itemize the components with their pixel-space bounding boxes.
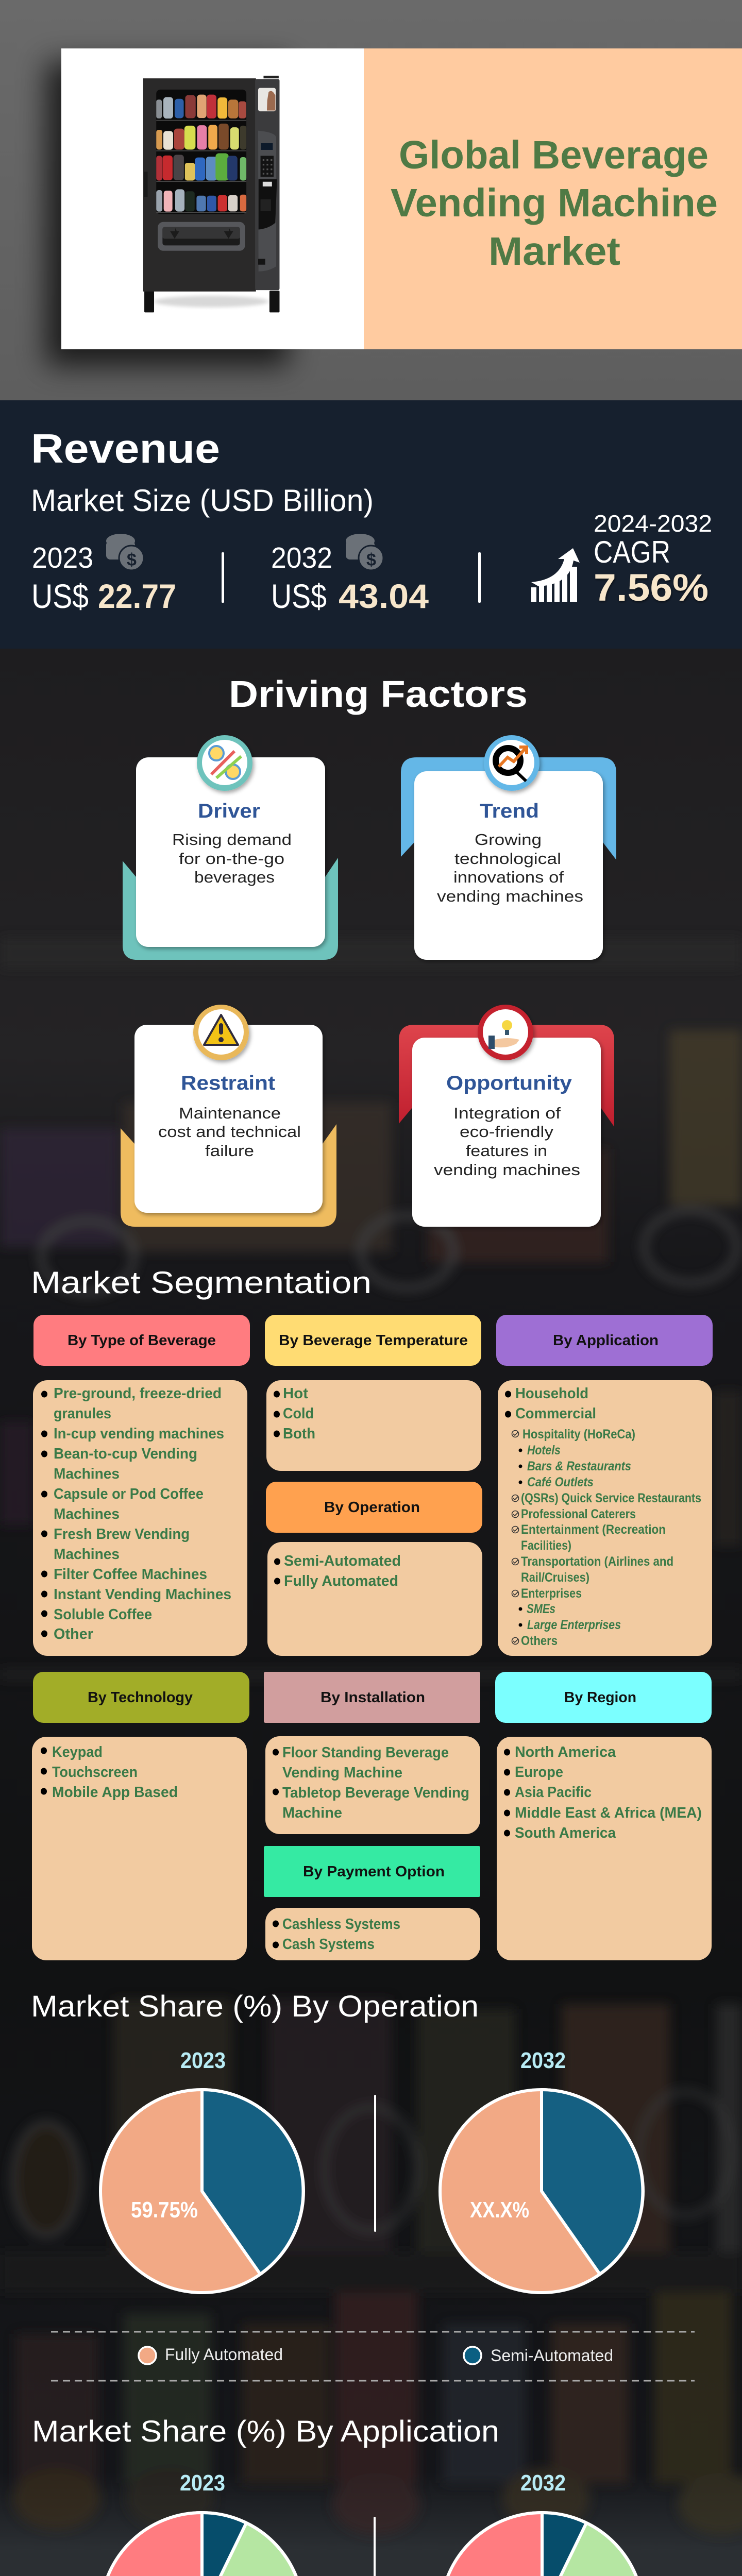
header: product image card <box>61 48 364 349</box>
panel: by type of beverage: Filter Coffee Machines <box>54 1566 207 1583</box>
panel: by type of beverage: granules <box>54 1405 111 1422</box>
heading: market segmentation: Market Segmentation <box>31 1265 372 1300</box>
panel: by operation: Fully Automated <box>284 1573 398 1589</box>
panel: by type of beverage: Instant Vending Machines <box>54 1586 231 1603</box>
legend: operation: Semi-Automated <box>491 2346 613 2365</box>
icon: hand and light bulb <box>478 1005 533 1060</box>
stat: 2032 revenue: 43.04 <box>339 577 429 615</box>
panel: by region: South America <box>515 1825 616 1841</box>
chart: operation 2023 pie: 59.75% <box>131 2197 198 2223</box>
panel: by application: Professional Caterers <box>521 1507 636 1521</box>
heading: driving factors: Driving Factors <box>229 674 528 715</box>
panel: by technology: Mobile App Based <box>52 1784 178 1801</box>
icon: coins 2023 <box>106 534 144 570</box>
panel: revenue <box>0 400 742 649</box>
panel: by application: (QSRs) Quick Service Restaurants <box>521 1491 701 1505</box>
panel: by installation: Vending Machine <box>282 1765 402 1781</box>
chart: application 2023 pie <box>100 2470 303 2576</box>
stat: CAGR: 2024-2032 <box>594 510 712 537</box>
chart: operation 2032 pie: 2032 <box>520 2048 566 2073</box>
panel: by operation: By Operation <box>324 1499 420 1516</box>
panel: by beverage temperature <box>265 1315 481 1471</box>
panel: by operation <box>266 1482 482 1656</box>
chart: operation 2023 pie: 2023 <box>180 2048 226 2073</box>
card: restraint: Maintenance <box>179 1104 281 1122</box>
panel: by type of beverage: Pre-ground, freeze-dried <box>54 1385 222 1402</box>
panel: by payment option: By Payment Option <box>303 1863 445 1880</box>
panel: by application: Household <box>515 1385 588 1402</box>
panel: by beverage temperature: Cold <box>283 1405 314 1422</box>
card: restraint: cost and technical <box>158 1123 301 1141</box>
title panel: Vending Machine <box>391 181 718 225</box>
card: driver: beverages <box>194 868 275 886</box>
panel: by type of beverage: Soluble Coffee <box>54 1606 152 1623</box>
stat: 2023 revenue: 22.77 <box>98 577 176 615</box>
panel: by region: North America <box>515 1744 616 1760</box>
icon: trend magnifier <box>484 735 539 791</box>
panel: by application: Others <box>521 1634 558 1648</box>
panel: by application: Facilities) <box>521 1538 571 1553</box>
panel: by beverage temperature: By Beverage Temperature <box>279 1332 468 1349</box>
card: restraint: Restraint <box>181 1072 275 1094</box>
title panel: Global Beverage <box>399 133 709 177</box>
panel: by application: Entertainment (Recreation <box>521 1522 666 1537</box>
stat: 2023 revenue: US$ <box>31 577 89 615</box>
panel: by installation: Tabletop Beverage Vending <box>282 1785 469 1801</box>
panel: by installation: Machine <box>282 1805 342 1821</box>
panel: by application: Café Outlets <box>527 1475 594 1489</box>
icon: vending machine <box>143 76 279 312</box>
panel: by installation <box>264 1672 480 1834</box>
icon: growth arrow <box>531 548 580 602</box>
chart: operation 2023 pie <box>100 2048 303 2293</box>
panel: by application: Large Enterprises <box>527 1618 621 1632</box>
background: dark photo collage <box>0 649 742 2576</box>
card: opportunity: Integration of <box>453 1104 561 1122</box>
panel: by type of beverage: Capsule or Pod Coffee <box>54 1486 204 1502</box>
panel: by region: Europe <box>515 1764 563 1781</box>
stat: 2032 revenue <box>271 541 429 615</box>
stat: 2032 revenue: 2032 <box>271 541 332 574</box>
card: driver: Driver <box>198 800 260 822</box>
panel: by application: SMEs <box>527 1602 555 1616</box>
legend: operation <box>139 2345 613 2365</box>
panel: by payment option: Cash Systems <box>282 1936 375 1953</box>
panel: by application <box>496 1315 713 1656</box>
title panel: Market <box>488 229 620 274</box>
heading: market share by operation: Market Share (%) By Operation <box>31 1990 479 2023</box>
panel: by type of beverage: Other <box>54 1626 93 1642</box>
panel: by type of beverage: By Type of Beverage <box>68 1332 216 1349</box>
panel: by payment option: Cashless Systems <box>282 1916 400 1933</box>
panel: by application: Commercial <box>515 1405 596 1422</box>
heading: revenue: Revenue <box>31 426 220 471</box>
panel: by technology: By Technology <box>88 1689 193 1706</box>
panel: by beverage temperature: Both <box>283 1426 315 1442</box>
stat: CAGR: CAGR <box>594 535 670 569</box>
stat: CAGR <box>594 510 712 609</box>
card: trend: Growing <box>475 831 542 849</box>
heading: market share by application: Market Share (%) By Application <box>32 2415 499 2448</box>
panel: by application: By Application <box>553 1332 659 1349</box>
icon: coins 2023: $ <box>127 550 137 570</box>
panel: by payment option <box>264 1846 480 1960</box>
panel: by application: Enterprises <box>521 1586 582 1601</box>
stat: CAGR: 7.56% <box>594 566 709 609</box>
card: opportunity: Opportunity <box>446 1072 572 1094</box>
panel: by region: Asia Pacific <box>515 1784 592 1801</box>
card: opportunity <box>399 1005 614 1227</box>
card: driver: Rising demand <box>172 831 292 849</box>
panel: by type of beverage: Machines <box>54 1466 120 1482</box>
panel: by technology: Keypad <box>52 1744 103 1760</box>
panel: by operation: Semi-Automated <box>284 1553 401 1569</box>
card: opportunity: features in <box>466 1142 547 1160</box>
panel: by region: By Region <box>564 1689 636 1706</box>
panel: by region <box>495 1672 712 1960</box>
panel: by application: Rail/Cruises) <box>521 1570 589 1585</box>
panel: by region: Middle East & Africa (MEA) <box>515 1805 702 1821</box>
legend: operation: Fully Automated <box>165 2345 283 2364</box>
card: trend: Trend <box>480 800 539 822</box>
card: trend: innovations of <box>453 868 564 886</box>
market size subheading: Market Size (USD Billion) <box>31 483 374 518</box>
card: driver <box>123 735 338 960</box>
card: trend <box>401 735 616 960</box>
chart: operation 2032 pie: XX.X% <box>470 2197 529 2223</box>
panel: by application: Transportation (Airlines and <box>521 1554 673 1569</box>
icon: coins 2032: $ <box>366 550 376 570</box>
panel: by application: Hospitality (HoReCa) <box>522 1427 635 1442</box>
icon: coins 2032 <box>346 534 383 570</box>
card: trend: vending machines <box>437 887 583 905</box>
panel: by type of beverage: Machines <box>54 1506 120 1522</box>
panel: by application: Bars & Restaurants <box>527 1459 631 1473</box>
panel: by type of beverage <box>33 1315 250 1656</box>
panel: by type of beverage: Bean-to-cup Vending <box>54 1446 197 1462</box>
panel: by technology: Touchscreen <box>52 1764 138 1781</box>
card: opportunity: eco-friendly <box>460 1123 554 1141</box>
icon: driver arrows and gears <box>197 735 252 791</box>
chart: application 2032 pie <box>441 2470 644 2576</box>
stat: 2023 revenue: 2023 <box>32 541 93 574</box>
panel: by technology <box>32 1672 249 1960</box>
panel: by installation: Floor Standing Beverage <box>282 1744 449 1761</box>
panel: by type of beverage: Machines <box>54 1546 120 1563</box>
panel: by type of beverage: In-cup vending machines <box>54 1426 224 1442</box>
stat: 2032 revenue: US$ <box>271 577 327 615</box>
card: driver: for on-the-go <box>179 850 284 868</box>
icon: warning triangle <box>193 1005 249 1060</box>
panel: by type of beverage: Fresh Brew Vending <box>54 1526 190 1543</box>
chart: operation 2032 pie <box>440 2048 643 2293</box>
title panel <box>364 48 742 349</box>
panel: by installation: By Installation <box>321 1689 425 1706</box>
chart: application 2032 pie: 2032 <box>520 2470 566 2496</box>
card: restraint <box>121 1005 336 1227</box>
stat: 2023 revenue <box>31 541 176 615</box>
panel: by beverage temperature: Hot <box>283 1385 308 1402</box>
chart: application 2023 pie: 2023 <box>180 2470 225 2496</box>
card: opportunity: vending machines <box>434 1161 580 1179</box>
panel: by application: Hotels <box>527 1443 561 1458</box>
card: trend: technological <box>454 850 561 868</box>
header section background <box>0 0 742 400</box>
card: restraint: failure <box>205 1142 254 1160</box>
